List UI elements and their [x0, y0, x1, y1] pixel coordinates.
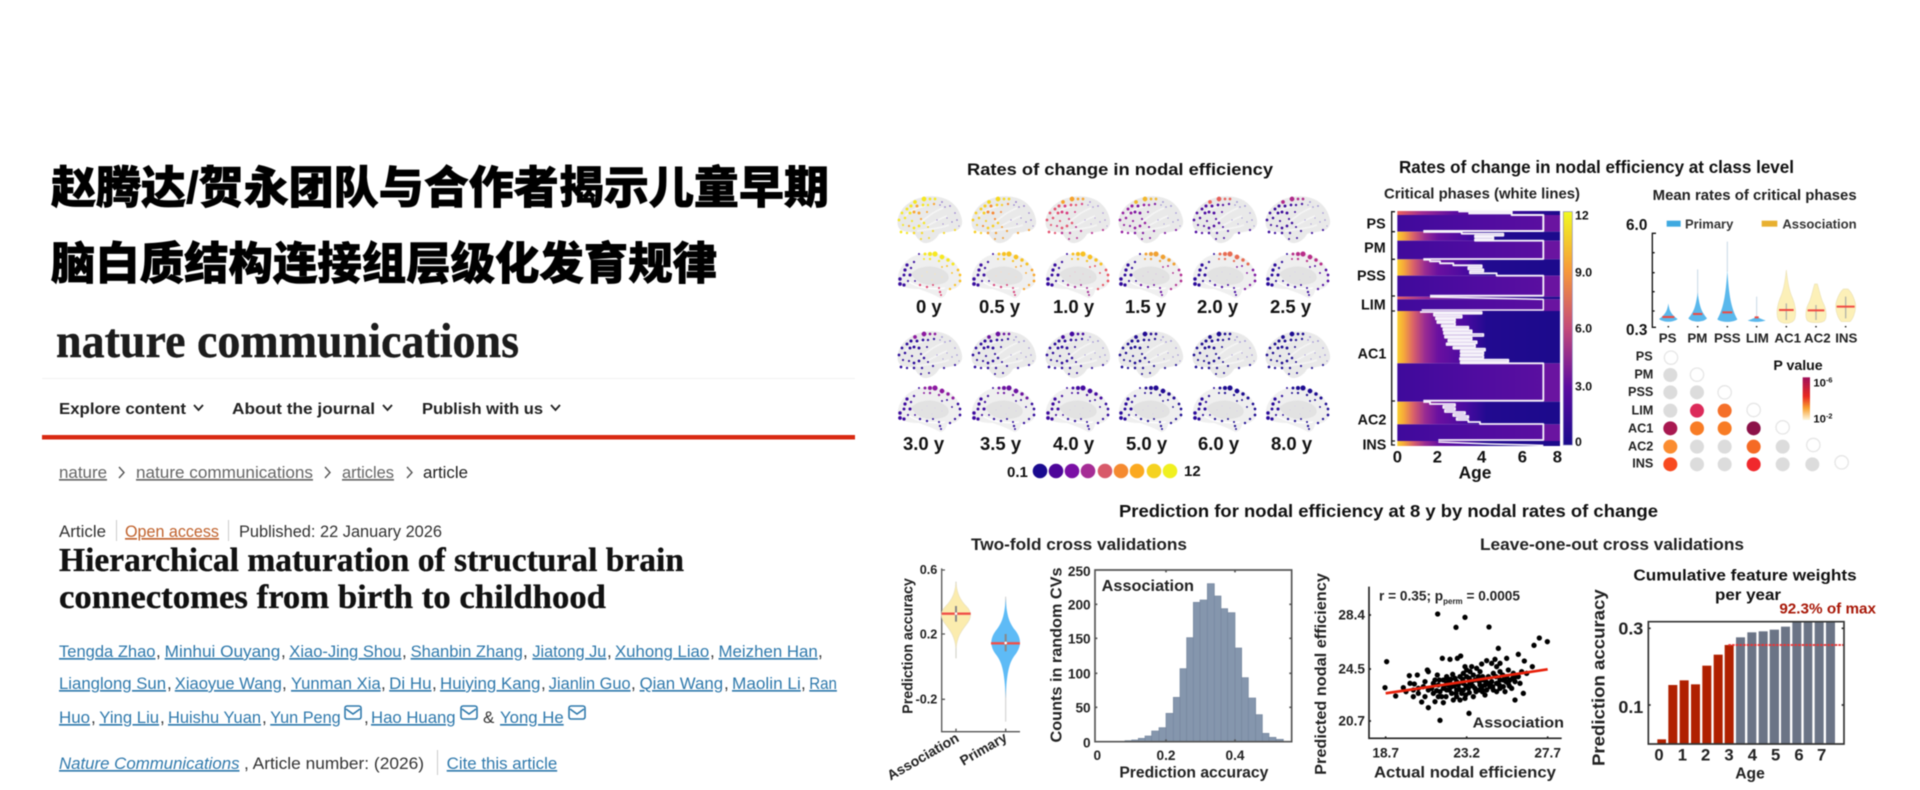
bar chart labels: Age [1735, 765, 1765, 782]
heading: class level: Rates of change in nodal efficiency at class level [1399, 157, 1794, 177]
author list: Hao Huang [371, 709, 456, 727]
P value colour key: 10 [1813, 378, 1826, 390]
title: Chinese headline: 赵腾达/贺永团队与合作者揭示儿童早期 [51, 164, 829, 213]
bar chart labels [1588, 589, 1826, 782]
histogram labels: 150 [1068, 631, 1091, 646]
violin axis: 6.0 [1626, 217, 1647, 234]
histogram labels: 50 [1075, 700, 1091, 715]
bar chart frame [1648, 622, 1844, 744]
scatter labels: 28.4 [1338, 607, 1365, 622]
scatter labels: 18.7 [1372, 746, 1399, 761]
author list: ,,,, [91, 708, 369, 727]
bar chart labels: 0.3 [1618, 618, 1643, 638]
author list: & [483, 708, 495, 727]
brain maps: 1.5 y [1119, 196, 1183, 317]
violin class labels: PSS [1714, 331, 1741, 346]
article headline: Hierarchical maturation of structural brain [59, 542, 684, 579]
navigation bar: Explore content [59, 401, 187, 418]
legend: node rate scale: 12 [1184, 463, 1201, 480]
scatter labels: Actual nodal efficiency [1374, 764, 1557, 781]
title: Chinese headline [51, 164, 829, 289]
scatter labels: 23.2 [1453, 746, 1480, 761]
histogram bars [1125, 584, 1283, 742]
P value colour key [1773, 358, 1832, 425]
chart: prediction accuracy violins [884, 563, 1020, 783]
author list: Meizhen Han [718, 643, 818, 661]
brain maps: 4.0 y: 4.0 y [1053, 433, 1095, 454]
violin class labels: AC1 [1774, 331, 1802, 346]
citation row: Cite this article [447, 755, 557, 773]
histogram labels: Prediction accuracy [1119, 764, 1269, 781]
colour bar [1563, 208, 1592, 449]
P value colour key: P value [1773, 358, 1823, 373]
violin class labels [1659, 331, 1858, 346]
bar chart labels: 0.1 [1618, 697, 1643, 717]
scatter axes [1369, 587, 1562, 738]
violin axes: 0.6 [920, 563, 937, 577]
brain maps: 8.0 y: 8.0 y [1271, 433, 1313, 454]
author list: Ran [809, 675, 837, 693]
colour bar: 0 [1575, 435, 1582, 449]
author list [59, 642, 837, 727]
brain maps: 1.0 y [1046, 196, 1110, 317]
x axis [1393, 448, 1562, 482]
bar chart labels: 0 [1654, 746, 1664, 765]
article headline [59, 542, 684, 616]
brain maps: 0.5 y [972, 196, 1036, 317]
violin axis [1626, 217, 1656, 339]
heading: prediction: Prediction for nodal efficiency at 8 y by nodal rates of change [1119, 501, 1658, 521]
author list: ,,,,,,,, [167, 674, 806, 693]
author list: Yun Peng [270, 709, 341, 727]
brain maps: 2.0 y: 2.0 y [1197, 296, 1239, 317]
chart: histogram of prediction accuracy [1049, 564, 1292, 781]
article meta row [59, 520, 442, 541]
violin axes: Association [884, 729, 961, 783]
bar chart labels: 4 [1748, 746, 1758, 765]
legend: node rate scale [1007, 463, 1201, 481]
brain maps: 3.0 y: 3.0 y [903, 433, 945, 454]
brain maps: 6.0 y [1193, 331, 1257, 454]
brain maps: 5.0 y: 5.0 y [1126, 433, 1168, 454]
threshold line [1728, 642, 1843, 647]
brain maps: 8.0 y [1266, 331, 1330, 454]
panel: article page [42, 164, 855, 775]
legend: primary and association [1667, 216, 1857, 231]
class bracket and labels [1357, 212, 1395, 453]
chart heading: Cumulative feature weights [1633, 568, 1857, 585]
significance matrix [1663, 351, 1848, 471]
legend: primary and association: Association [1782, 216, 1857, 231]
brain maps: 1.5 y: 1.5 y [1125, 296, 1167, 317]
heading: two-fold cross validations: Two-fold cross validations [971, 536, 1187, 554]
brain maps: 2.0 y [1193, 196, 1257, 317]
white critical phase lines [1420, 211, 1543, 445]
chart heading [1633, 568, 1857, 604]
chart heading: per year [1715, 587, 1781, 604]
violins by class [1659, 242, 1856, 327]
author list: Minhui Ouyang [165, 643, 280, 661]
significance matrix labels: PSS [1628, 385, 1653, 399]
citation row [59, 750, 557, 775]
violin class labels: AC2 [1804, 331, 1831, 346]
x axis: 6 [1518, 448, 1527, 467]
scatter labels: Predicted nodal efficiency [1313, 573, 1330, 775]
threshold label: 92.3% of max [1779, 601, 1877, 617]
citation row: , Article number: (2026) [244, 755, 424, 773]
bars after threshold [1736, 622, 1835, 744]
brain maps: 6.0 y: 6.0 y [1198, 433, 1240, 454]
breadcrumb: articles [342, 464, 394, 482]
author list: Huo [59, 709, 90, 727]
histogram labels: 250 [1068, 564, 1091, 579]
brain maps: 0 y: 0 y [916, 296, 942, 317]
violin axes: -0.2 [916, 693, 937, 707]
scatter labels: perm [1443, 597, 1463, 606]
bar chart labels: Prediction accuracy [1588, 589, 1608, 766]
author list: Xiaoyue Wang [175, 675, 282, 693]
x axis: 0 [1393, 448, 1402, 467]
panel: mean rates of critical phases [1626, 188, 1858, 471]
violin: primary [991, 597, 1020, 722]
author list: Yong He [500, 709, 564, 727]
class bracket and labels: PSS [1357, 268, 1386, 284]
significance matrix labels: AC2 [1628, 440, 1653, 454]
significance matrix labels: AC1 [1628, 421, 1653, 435]
bars before threshold [1657, 645, 1734, 744]
chart: actual versus predicted scatter [1313, 573, 1564, 781]
histogram labels: Association [1102, 578, 1194, 595]
scatter labels: = 0.0005 [1463, 589, 1520, 604]
brain maps: 0 y [898, 196, 962, 317]
colour bar: 9.0 [1575, 265, 1592, 279]
author list: Lianglong Sun [59, 675, 166, 693]
heading: mean rates: Mean rates of critical phases [1653, 188, 1857, 204]
navigation bar: Publish with us [422, 401, 543, 418]
P value colour key: -6 [1826, 376, 1832, 385]
brain maps: 1.0 y: 1.0 y [1053, 296, 1095, 317]
author list: Ying Liu [99, 709, 159, 727]
bar chart labels: 5 [1771, 746, 1780, 765]
violin: association [942, 582, 971, 658]
P value colour key: 10 [1813, 413, 1826, 425]
regression line [1386, 669, 1548, 693]
brain maps: 0.5 y: 0.5 y [979, 296, 1021, 317]
class bracket and labels: PM [1364, 241, 1386, 257]
class bracket and labels: PS [1367, 217, 1386, 233]
histogram labels: 0.4 [1226, 748, 1245, 763]
bar chart labels: 7 [1817, 746, 1826, 765]
brain maps: 5.0 y [1119, 331, 1183, 454]
author list: Xuhong Liao [615, 643, 709, 661]
breadcrumb: nature [59, 464, 107, 482]
author list: Huiying Kang [440, 675, 540, 693]
breadcrumb: nature communications [136, 464, 313, 482]
legend: node rate scale: 0.1 [1007, 464, 1028, 481]
bar chart labels: 3 [1724, 746, 1734, 765]
histogram labels: 200 [1068, 597, 1091, 612]
class bracket and labels: AC2 [1358, 413, 1386, 429]
brain maps: 4.0 y [1046, 331, 1110, 454]
violin class labels: INS [1835, 331, 1858, 346]
histogram frame [1095, 570, 1292, 742]
x axis: 8 [1553, 448, 1562, 467]
author list: Jiatong Ju [532, 643, 606, 661]
panel: critical phases heatmap [1357, 186, 1592, 482]
citation row: Nature Communications [59, 755, 239, 773]
colour bar: 6.0 [1575, 322, 1592, 336]
brain maps: 2.5 y [1266, 196, 1330, 317]
histogram labels: Counts in random CVs [1049, 567, 1066, 742]
class bracket and labels: LIM [1361, 297, 1386, 313]
histogram labels [1049, 564, 1269, 781]
brain maps: 3.0 y [898, 331, 962, 454]
author list: Maolin Li [732, 675, 801, 693]
P value colour key: -2 [1826, 411, 1832, 420]
article headline: connectomes from birth to childhood [59, 579, 606, 616]
journal name: nature communications [56, 313, 519, 368]
class bracket and labels: AC1 [1358, 347, 1386, 363]
scatter labels: 27.7 [1534, 746, 1561, 761]
violin axes: Prediction accuracy [901, 578, 917, 714]
breadcrumb [59, 464, 468, 482]
chart: cumulative feature weights [1588, 568, 1877, 782]
bar chart labels: 1 [1678, 746, 1687, 765]
article meta row: Article [59, 523, 106, 541]
brain maps: 2.5 y: 2.5 y [1270, 296, 1312, 317]
colour bar: 3.0 [1575, 379, 1592, 393]
brain maps: 3.5 y: 3.5 y [980, 433, 1022, 454]
navigation bar: About the journal [232, 401, 375, 418]
article meta row: Published: 22 January 2026 [239, 523, 442, 541]
violin class labels: PM [1687, 331, 1707, 346]
heatmap cells [1397, 211, 1560, 446]
author list: Huishu Yuan [168, 709, 261, 727]
panel: rates of change brain maps [898, 160, 1330, 481]
significance matrix labels: INS [1632, 457, 1653, 471]
violin axes: Primary [957, 729, 1010, 769]
scatter labels [1313, 573, 1564, 781]
heading: rates of change: Rates of change in nodal efficiency [967, 160, 1274, 179]
heading: critical phases: Critical phases (white lines) [1384, 186, 1580, 202]
histogram labels: 100 [1068, 666, 1091, 681]
bar chart labels: 6 [1794, 746, 1804, 765]
histogram labels: 0 [1083, 735, 1091, 750]
author list: Shanbin Zhang [411, 643, 523, 661]
class bracket and labels: INS [1362, 437, 1386, 453]
title: Chinese headline: 脑白质结构连接组层级化发育规律 [51, 239, 717, 289]
significance matrix labels: LIM [1632, 403, 1653, 417]
histogram labels: 0 [1094, 748, 1102, 763]
violin axis: 0.3 [1626, 322, 1647, 339]
scatter labels: 24.5 [1338, 661, 1365, 676]
colour bar: 12 [1575, 208, 1589, 222]
author list: Yunman Xia [291, 675, 382, 693]
author list: Qian Wang [640, 675, 723, 693]
author list: Xiao-Jing Shou [289, 643, 401, 661]
article meta row: Open access [125, 523, 219, 541]
violin class labels: PS [1659, 331, 1677, 346]
breadcrumb: article [423, 464, 468, 482]
navigation bar [42, 378, 855, 418]
author list: Di Hu [389, 675, 432, 693]
author list: ,,,,,,, [156, 642, 823, 661]
x axis: Age [1459, 462, 1492, 482]
x axis: 2 [1433, 448, 1442, 467]
violin class labels: LIM [1746, 331, 1769, 346]
significance matrix labels [1628, 350, 1653, 471]
scatter points [1385, 614, 1547, 720]
author list: Tengda Zhao [59, 643, 156, 661]
violin axes: 0.2 [920, 627, 937, 641]
bar chart labels: 2 [1701, 746, 1710, 765]
x axis: 4 [1477, 448, 1487, 467]
author list: Jianlin Guo [549, 675, 631, 693]
significance matrix labels: PS [1636, 350, 1653, 364]
histogram labels: 0.2 [1157, 748, 1176, 763]
brain maps: 3.5 y [972, 331, 1036, 454]
scatter labels: r = 0.35; p [1379, 589, 1443, 604]
red divider [42, 435, 855, 440]
scatter labels: 20.7 [1338, 713, 1365, 728]
scatter labels: Association [1473, 714, 1564, 731]
heading: leave-one-out: Leave-one-out cross validations [1480, 536, 1744, 554]
violin axes [884, 563, 1020, 783]
significance matrix labels: PM [1634, 367, 1653, 381]
legend: primary and association: Primary [1685, 216, 1734, 231]
